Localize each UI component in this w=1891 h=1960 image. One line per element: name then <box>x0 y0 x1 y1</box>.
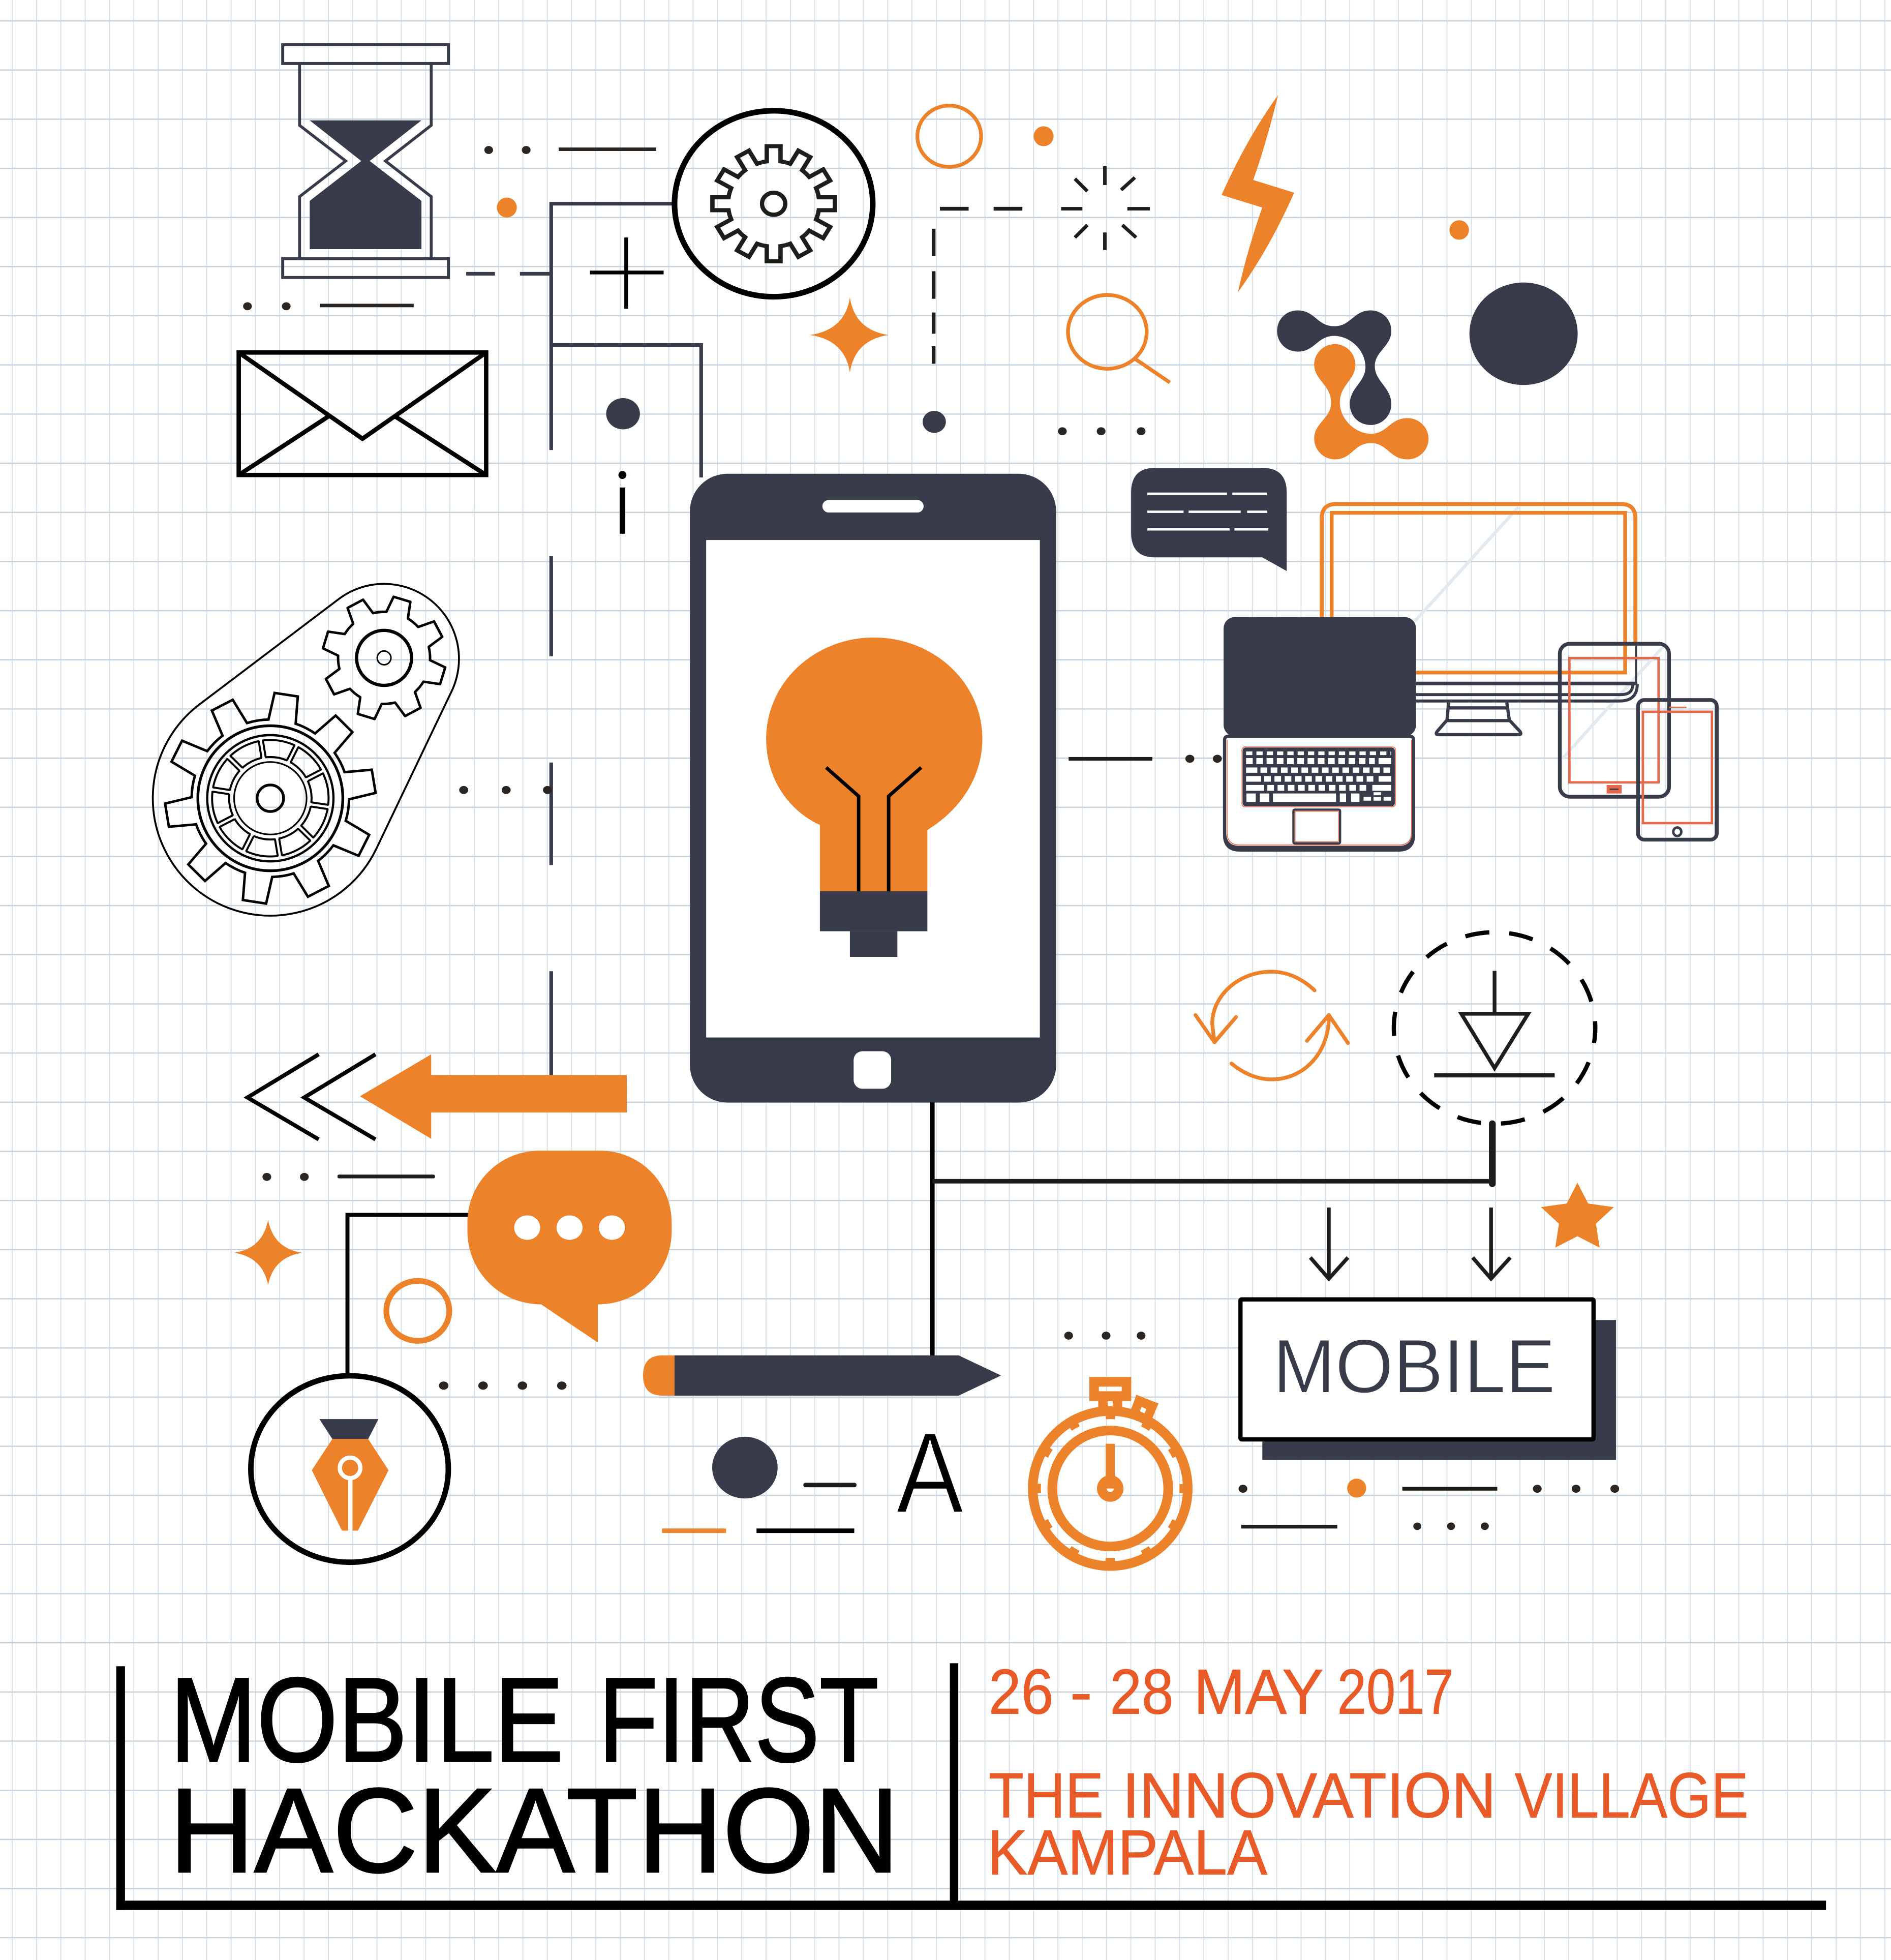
phone <box>1638 700 1717 839</box>
tablet <box>1560 644 1669 797</box>
event date: MAY <box>1194 1656 1324 1728</box>
dashed connector to burst <box>934 209 1022 364</box>
event venue: VILLAGE <box>1515 1760 1749 1831</box>
dark ellipse <box>712 1437 778 1498</box>
monitor <box>1322 504 1664 759</box>
dotted lines under mobile box <box>1239 1485 1619 1530</box>
orange line <box>662 1528 726 1533</box>
orange dot <box>1449 220 1469 240</box>
icon: molecule network <box>1277 310 1428 460</box>
event date: 28 <box>1110 1656 1174 1728</box>
dotted line <box>1058 427 1145 435</box>
dark circle <box>1470 283 1578 385</box>
icon: magnifier <box>1068 295 1170 382</box>
icon: four point star <box>810 297 889 373</box>
icon: star <box>1541 1183 1614 1248</box>
double chevron arrow <box>248 1054 376 1139</box>
dotted line <box>439 1381 567 1390</box>
mobile box: MOBILE <box>1273 1323 1556 1409</box>
icon: lightning <box>1222 95 1294 292</box>
phone <box>690 474 1056 1102</box>
title: MOBILE <box>170 1653 564 1787</box>
down arrow <box>1310 1208 1348 1279</box>
connector: phone to laptop <box>1069 755 1222 763</box>
dotted line by envelope <box>243 302 414 310</box>
event date: 2017 <box>1337 1656 1453 1728</box>
icon: dark speech bubble <box>1131 468 1287 571</box>
event venue: THE <box>989 1760 1104 1831</box>
icon: pen nib in circle <box>251 1376 448 1562</box>
icon: info <box>606 398 640 534</box>
event date: 26 <box>989 1656 1054 1728</box>
icon: stopwatch <box>1033 1377 1187 1566</box>
icon: plus <box>590 237 664 309</box>
icon: burst <box>1061 166 1150 250</box>
icon: orange ring <box>918 106 981 167</box>
connector below phone <box>932 1102 1493 1358</box>
dotted line by hourglass <box>484 146 656 154</box>
short line <box>803 1483 857 1487</box>
event venue: KAMPALA <box>987 1817 1267 1888</box>
title: FIRST <box>599 1653 878 1787</box>
title <box>169 1653 899 1898</box>
connector to pen circle <box>348 1215 469 1375</box>
orange dot <box>1347 1479 1366 1498</box>
title: HACKATHON <box>169 1764 899 1898</box>
icon: pencil <box>643 1355 1001 1396</box>
icon: gear in circle <box>675 111 873 297</box>
dotted line above stopwatch <box>1064 1332 1145 1340</box>
mobile box <box>1240 1300 1616 1460</box>
icon: orange ring <box>386 1281 449 1341</box>
icon: orange chat bubble <box>468 1151 672 1342</box>
down arrow <box>1473 1208 1510 1279</box>
event venue <box>987 1760 1749 1888</box>
footer frame <box>116 1663 1826 1910</box>
orange dot <box>1033 126 1054 146</box>
dotted line by gears <box>459 786 552 794</box>
node dot <box>923 411 946 433</box>
event date <box>989 1656 1453 1728</box>
laptop <box>1224 617 1416 850</box>
icon: light bulb <box>766 638 983 957</box>
event date: - <box>1070 1656 1092 1728</box>
icon: envelope <box>239 352 486 475</box>
icon: devices <box>1224 504 1717 850</box>
icon: hourglass <box>283 45 448 278</box>
icon: refresh arrows <box>1196 972 1348 1079</box>
orange dot <box>497 197 517 218</box>
icon: four point star small <box>234 1220 302 1285</box>
event venue: INNOVATION <box>1122 1760 1496 1831</box>
letter A: A <box>896 1408 964 1537</box>
black line <box>756 1528 855 1533</box>
icon: download in dashed circle <box>1394 932 1595 1124</box>
icon: gears panel <box>153 584 459 916</box>
dotted line under arrows <box>262 1173 435 1181</box>
orange arrow <box>360 1054 627 1139</box>
connector lines left <box>466 204 701 1075</box>
